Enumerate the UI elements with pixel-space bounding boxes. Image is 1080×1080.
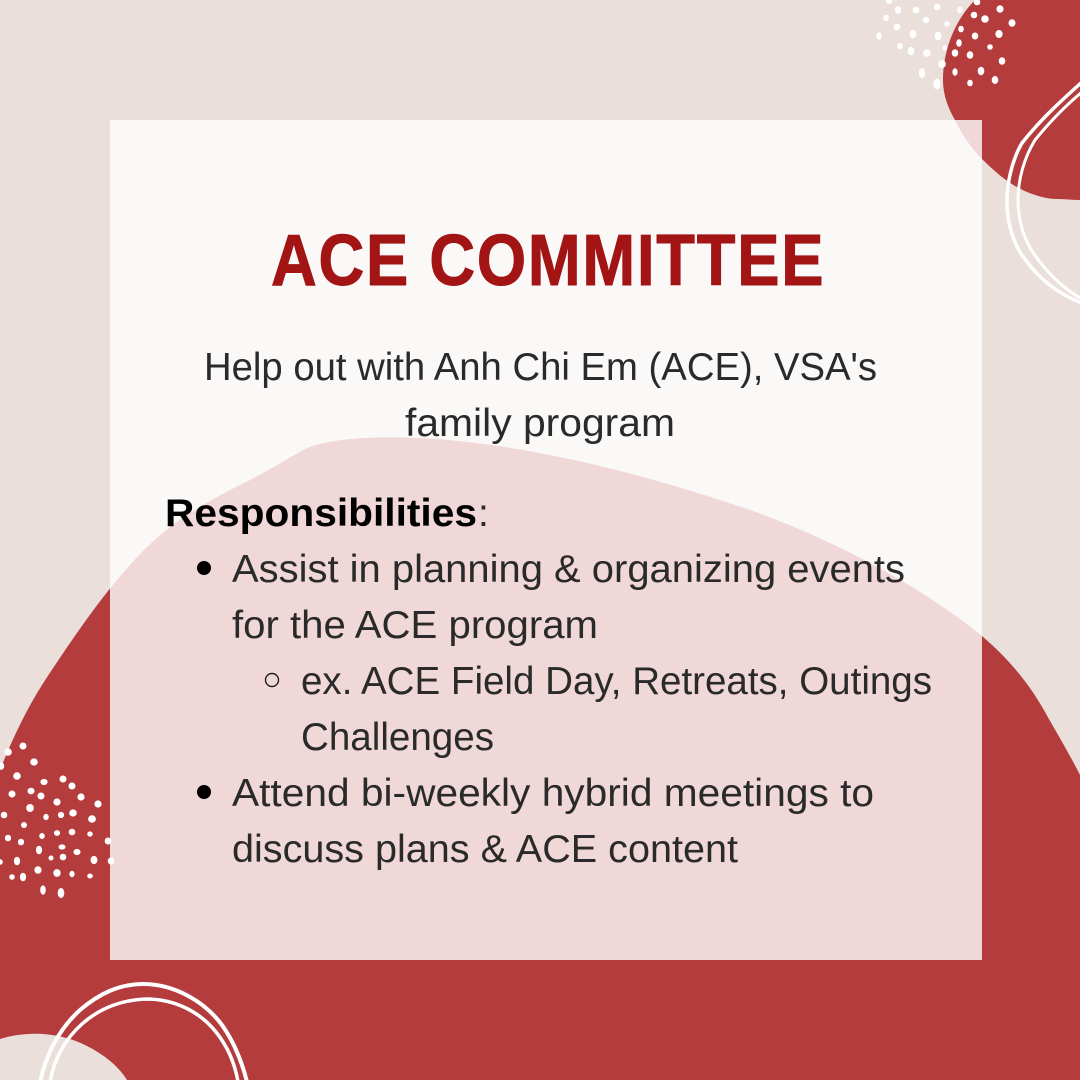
- translucent white panel: [110, 120, 982, 960]
- bullet: planning events: for the ACE program: [232, 604, 598, 647]
- left dots: [0, 743, 114, 898]
- bottom left beige blob: [0, 1034, 127, 1080]
- intro text: Help out with Anh Chi Em (ACE), VSA's: [204, 346, 877, 389]
- top right dots: [876, 0, 1015, 89]
- bullet: meetings: [197, 772, 874, 871]
- bullet: planning events: [197, 548, 905, 647]
- responsibilities heading: :: [478, 492, 489, 535]
- sub-bullet: examples: Challenges: [301, 716, 494, 759]
- sub-bullet: examples: ex. ACE Field Day, Retreats, Outings: [301, 660, 932, 703]
- bullet: planning events: Assist in planning & organizing events: [232, 548, 905, 591]
- sub-bullet: examples: [266, 660, 932, 759]
- top right red blob: [943, 0, 1080, 200]
- bullet: meetings: Attend bi-weekly hybrid meetings to: [232, 772, 874, 815]
- intro text: [204, 346, 877, 445]
- bottom left double ring: [40, 984, 247, 1080]
- responsibilities heading: Responsibilities: [165, 492, 477, 535]
- top right double ring: [1007, 82, 1080, 303]
- bullet: meetings: discuss plans & ACE content: [232, 828, 738, 871]
- title: ACE COMMITTEE: [271, 221, 825, 301]
- intro text: family program: [405, 402, 675, 445]
- large red blob: [0, 437, 1080, 1080]
